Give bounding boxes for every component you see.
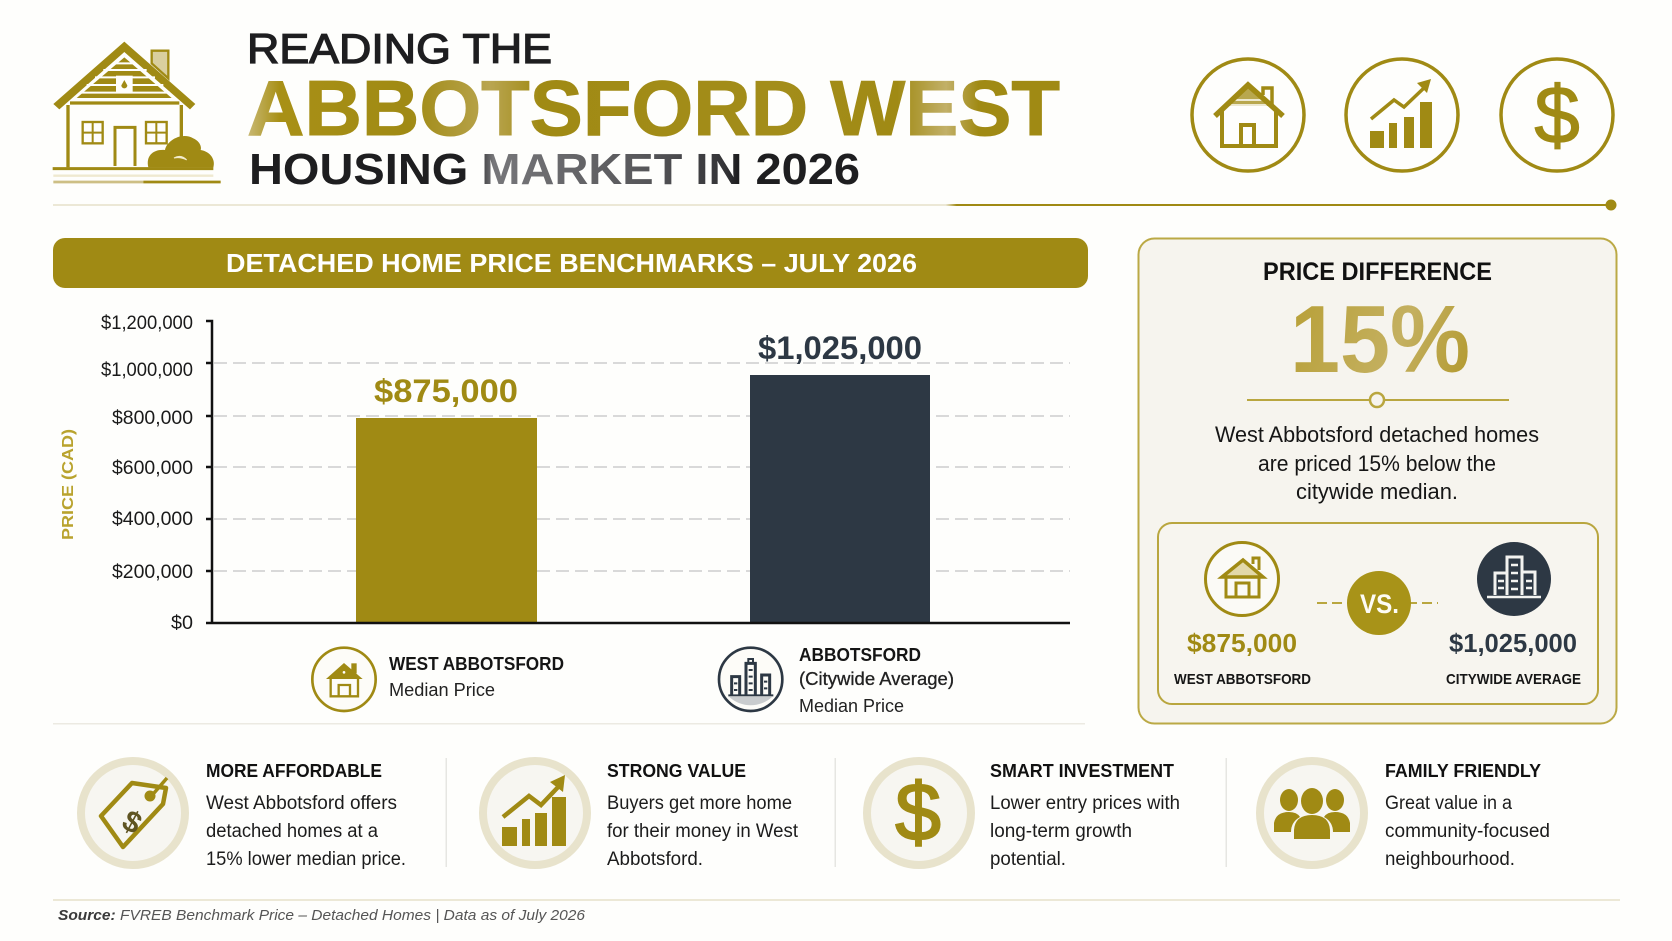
value: citywide: $1,025,000 — [1449, 628, 1577, 658]
panel: price difference — [1138, 238, 1616, 724]
vs badge: VS. — [1360, 589, 1399, 619]
y axis labels: $200,000 — [112, 562, 193, 583]
benefit: more affordable: 15% lower median price. — [206, 849, 406, 870]
icon: house in circle — [1192, 59, 1304, 171]
icon: price tag: $ — [117, 804, 147, 841]
icon: growth chart — [483, 761, 587, 865]
y axis labels: $1,200,000 — [101, 313, 193, 334]
y axis labels — [101, 313, 193, 634]
icon: city — [1477, 542, 1551, 616]
y axis labels: $0 — [171, 613, 193, 634]
vs badge — [1317, 571, 1438, 635]
description: citywide median. — [1296, 479, 1458, 504]
value: citywide: $1,025,000 — [758, 330, 922, 366]
benefit: more affordable: MORE AFFORDABLE — [206, 761, 382, 781]
benefit: family friendly: Great value in a — [1385, 793, 1512, 814]
title: ABBOTSFORD WEST — [247, 64, 1060, 152]
icon: people — [1260, 761, 1364, 865]
banner heading — [53, 238, 1088, 288]
icon: dollar: $ — [895, 767, 941, 858]
title: HOUSING MARKET IN 2026 — [249, 145, 860, 194]
y axis labels: $400,000 — [112, 509, 193, 530]
comparison box — [1158, 523, 1598, 704]
panel heading: PRICE DIFFERENCE — [1263, 258, 1492, 286]
y axis title: PRICE (CAD) — [60, 429, 77, 540]
legend: West Abbotsford — [312, 648, 564, 711]
source footer: Source: FVREB Benchmark Price – Detached Homes | Data as of July 2026 — [58, 907, 586, 924]
divider — [1247, 393, 1509, 407]
icon: dollar in circle — [1501, 59, 1613, 171]
bar chart — [60, 313, 1070, 634]
title: READING THE — [247, 25, 552, 72]
benefit: family friendly: FAMILY FRIENDLY — [1385, 761, 1541, 781]
icon: house logo — [53, 42, 221, 182]
description — [1215, 422, 1539, 504]
benefit: strong value: Buyers get more home — [607, 793, 792, 814]
value: West Abbotsford: $875,000 — [374, 373, 518, 409]
y axis labels: $1,000,000 — [101, 360, 193, 381]
header — [53, 25, 1617, 210]
panel: price benchmarks chart — [53, 238, 1088, 716]
bar: Abbotsford citywide — [750, 375, 930, 623]
icon: dollar in circle: $ — [1534, 70, 1580, 161]
value: west: $875,000 — [1187, 628, 1297, 658]
benefit: strong value: STRONG VALUE — [607, 761, 746, 781]
legend: Abbotsford citywide: Median Price — [799, 696, 904, 716]
legend: West Abbotsford: Median Price — [389, 680, 495, 700]
benefit: smart investment: SMART INVESTMENT — [990, 761, 1174, 781]
benefit: strong value — [483, 761, 799, 870]
benefit: strong value: for their money in West — [607, 821, 799, 842]
benefit: family friendly: neighbourhood. — [1385, 849, 1515, 870]
icon: house — [1206, 542, 1278, 616]
legend: Abbotsford citywide: ABBOTSFORD — [799, 645, 921, 665]
big number: 15% — [1290, 286, 1470, 393]
label: west: WEST ABBOTSFORD — [1174, 671, 1311, 688]
y axis labels: $800,000 — [112, 408, 193, 429]
description: West Abbotsford detached homes — [1215, 422, 1539, 447]
benefit: more affordable — [81, 761, 406, 870]
label: citywide: CITYWIDE AVERAGE — [1446, 671, 1581, 688]
icon: growth chart in circle — [1346, 59, 1458, 171]
icon: dollar — [867, 761, 971, 865]
icon: price tag — [81, 761, 185, 865]
benefit: strong value: Abbotsford. — [607, 849, 703, 870]
y axis labels: $600,000 — [112, 458, 193, 479]
benefit: smart investment: Lower entry prices with — [990, 793, 1180, 814]
benefit: smart investment — [867, 761, 1180, 870]
benefit: family friendly: community-focused — [1385, 821, 1550, 842]
benefit: more affordable: detached homes at a — [206, 821, 378, 842]
benefit: more affordable: West Abbotsford offers — [206, 793, 397, 814]
legend: Abbotsford citywide: (Citywide Average) — [799, 669, 954, 689]
benefit: smart investment: long-term growth — [990, 821, 1132, 842]
legend: Abbotsford citywide — [719, 645, 954, 716]
bar: West Abbotsford — [356, 418, 537, 623]
header divider — [53, 200, 1616, 210]
benefit: family friendly — [1260, 761, 1550, 870]
legend: West Abbotsford: WEST ABBOTSFORD — [389, 654, 564, 674]
axes — [206, 321, 1070, 623]
banner heading: DETACHED HOME PRICE BENCHMARKS – JULY 2026 — [226, 248, 917, 278]
title — [247, 25, 1060, 194]
description: are priced 15% below the — [1258, 451, 1496, 476]
benefit: smart investment: potential. — [990, 849, 1066, 870]
